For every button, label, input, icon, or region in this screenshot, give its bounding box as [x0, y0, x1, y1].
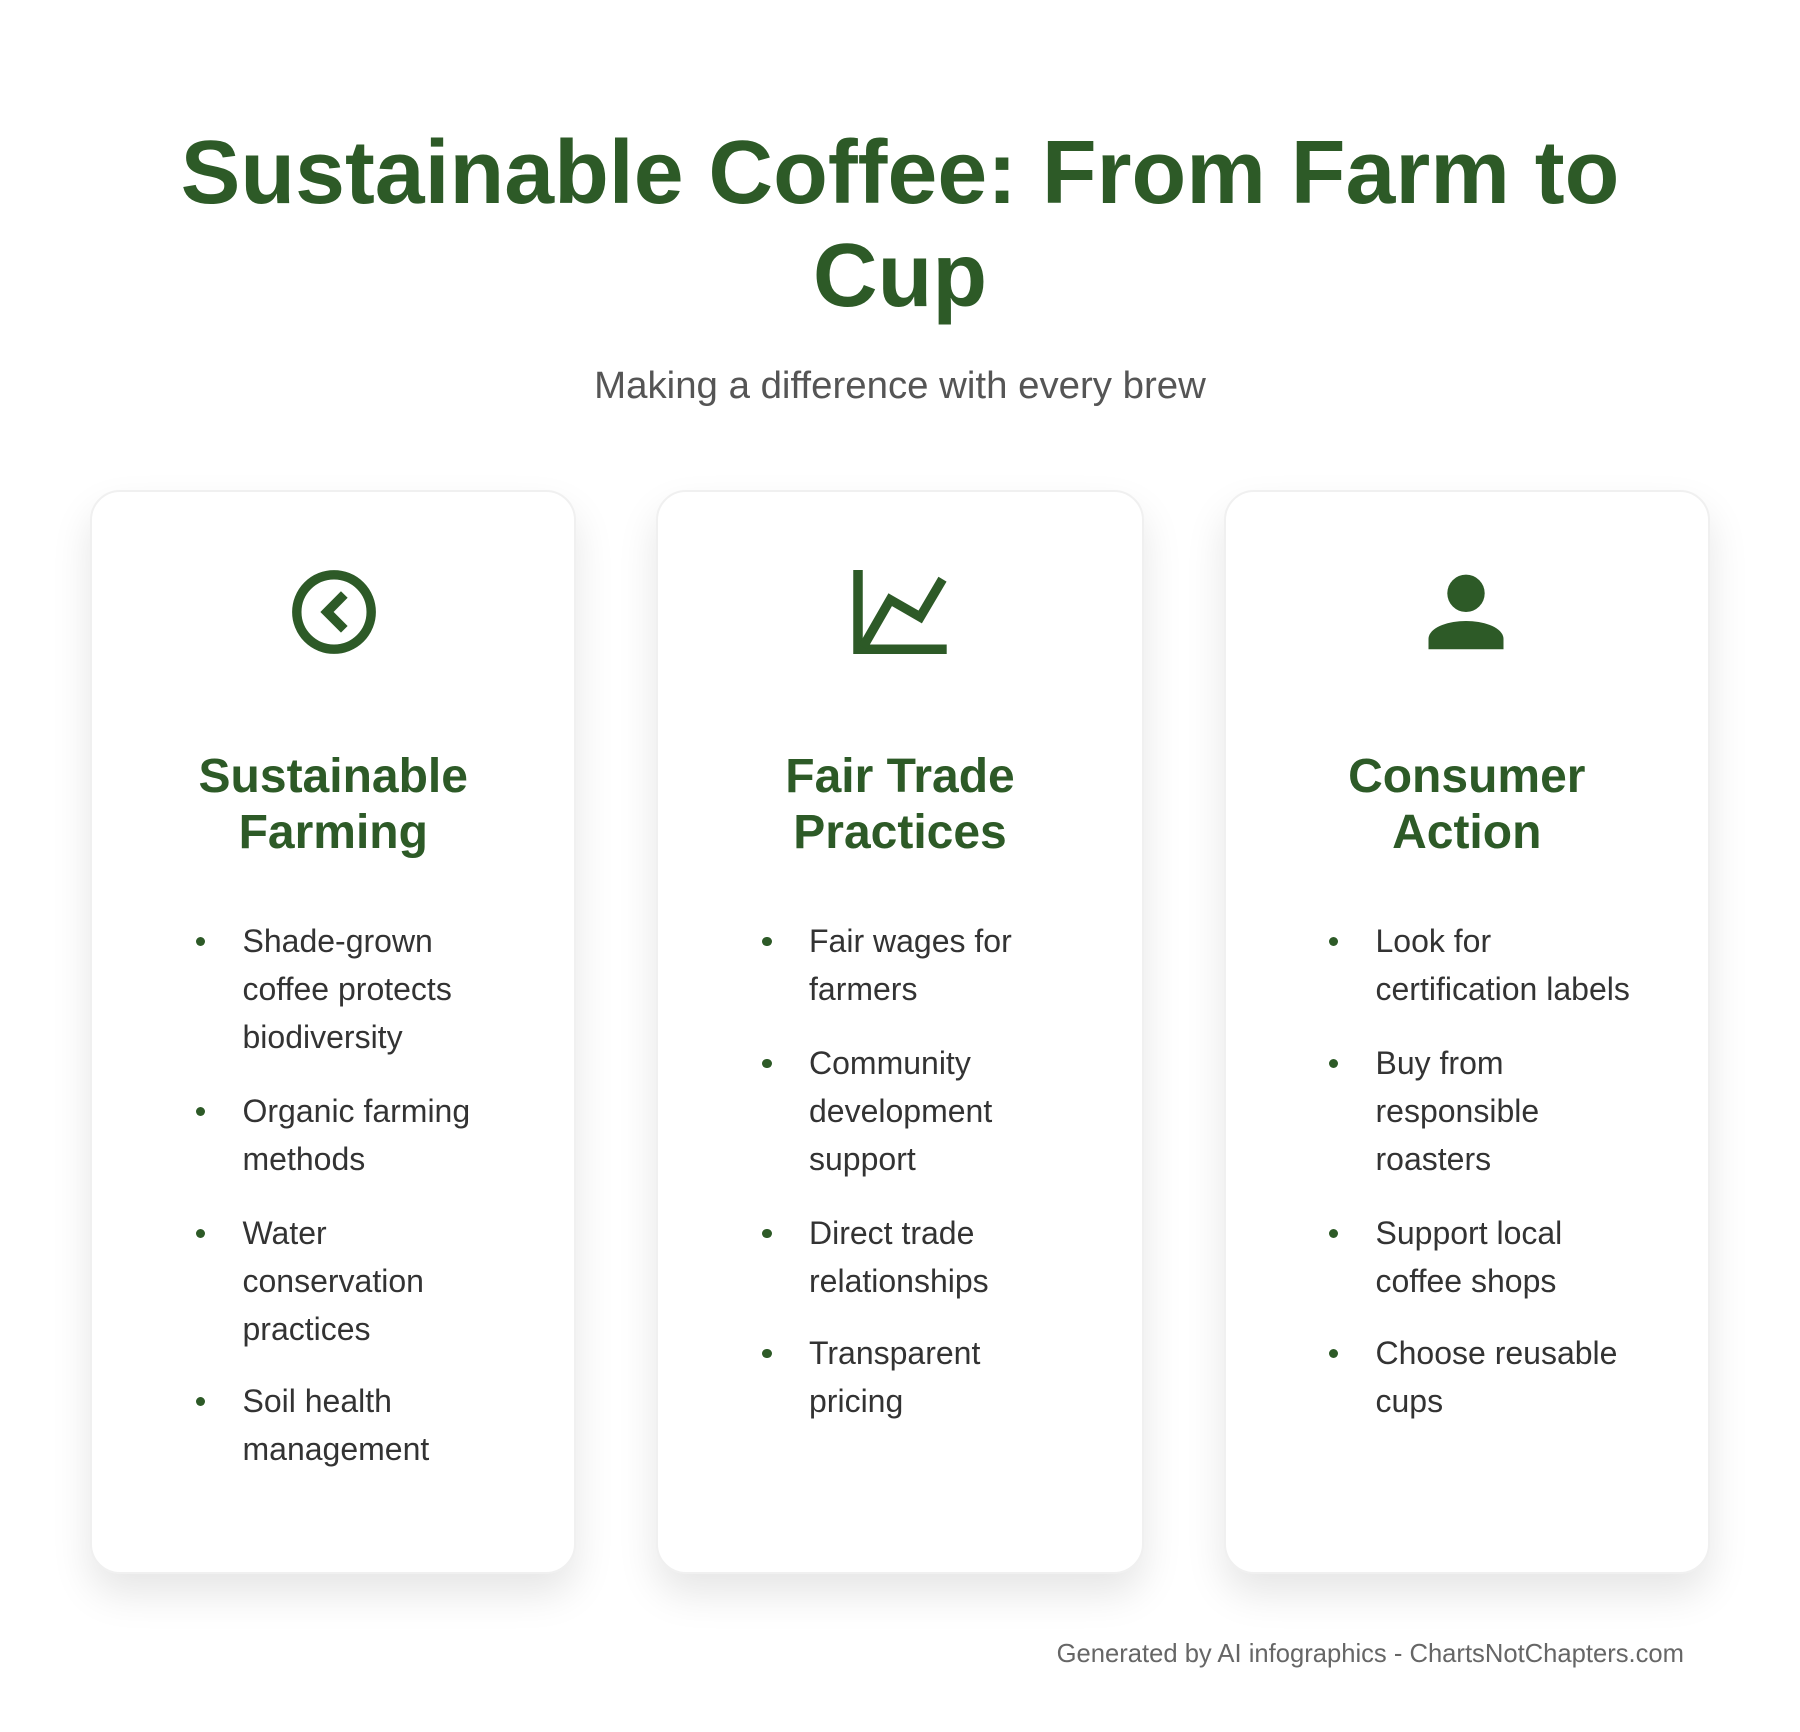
list: sustainable farming: Water	[242, 1215, 327, 1251]
heading: fair trade practices: Practices	[793, 806, 1007, 858]
heading: sustainable farming	[199, 750, 468, 858]
list: fair trade practices: Transparent	[809, 1335, 980, 1371]
list: fair trade practices	[762, 923, 1012, 1419]
list: consumer action: cups	[1376, 1383, 1443, 1419]
list: sustainable farming: Organic farming	[242, 1093, 470, 1129]
list: sustainable farming: conservation	[242, 1263, 424, 1299]
panel: consumer action	[1224, 490, 1710, 1574]
list: fair trade practices: Direct trade	[809, 1215, 974, 1251]
list: fair trade practices: Fair wages for	[809, 923, 1012, 959]
subtitle: Making a difference with every brew	[594, 364, 1206, 407]
title	[181, 122, 1619, 325]
list: consumer action: Choose reusable	[1376, 1335, 1617, 1371]
footer credit: Generated by AI infographics - ChartsNotChapters.com	[1057, 1640, 1684, 1668]
list: sustainable farming: Shade-grown	[242, 923, 433, 959]
panel: fair trade practices	[656, 490, 1144, 1574]
heading: fair trade practices	[785, 750, 1015, 858]
list: fair trade practices: relationships	[809, 1263, 989, 1299]
list: consumer action: Buy from	[1376, 1045, 1504, 1081]
list: sustainable farming	[196, 923, 470, 1467]
icon: person	[1428, 574, 1504, 650]
list: fair trade practices: farmers	[809, 971, 917, 1007]
list: fair trade practices: Community	[809, 1045, 971, 1081]
list: consumer action: roasters	[1376, 1141, 1491, 1177]
list: sustainable farming: methods	[242, 1141, 365, 1177]
heading: consumer action: Action	[1392, 806, 1541, 858]
list: consumer action: coffee shops	[1376, 1263, 1556, 1299]
list: consumer action: responsible	[1376, 1093, 1539, 1129]
heading: sustainable farming: Farming	[239, 806, 428, 858]
heading: sustainable farming: Sustainable	[199, 750, 468, 803]
list: fair trade practices: support	[809, 1141, 916, 1177]
list: consumer action	[1329, 923, 1630, 1419]
list: sustainable farming: coffee protects	[242, 971, 452, 1007]
list: sustainable farming: management	[242, 1431, 429, 1467]
list: sustainable farming: practices	[242, 1311, 371, 1347]
title: Cup	[813, 225, 987, 325]
list: fair trade practices: development	[809, 1093, 992, 1129]
heading: fair trade practices: Fair Trade	[785, 750, 1015, 803]
icon: circled chevron	[292, 570, 376, 654]
list: sustainable farming: biodiversity	[242, 1019, 403, 1055]
heading: consumer action	[1348, 750, 1585, 858]
heading: consumer action: Consumer	[1348, 750, 1585, 803]
list: fair trade practices: pricing	[809, 1383, 903, 1419]
title: Sustainable Coffee: From Farm to	[181, 122, 1619, 222]
list: consumer action: Look for	[1376, 923, 1491, 959]
panel: sustainable farming	[90, 490, 576, 1574]
list: sustainable farming: Soil health	[242, 1383, 392, 1419]
list: consumer action: certification labels	[1376, 971, 1630, 1007]
icon: line chart	[853, 570, 947, 654]
list: consumer action: Support local	[1376, 1215, 1562, 1251]
